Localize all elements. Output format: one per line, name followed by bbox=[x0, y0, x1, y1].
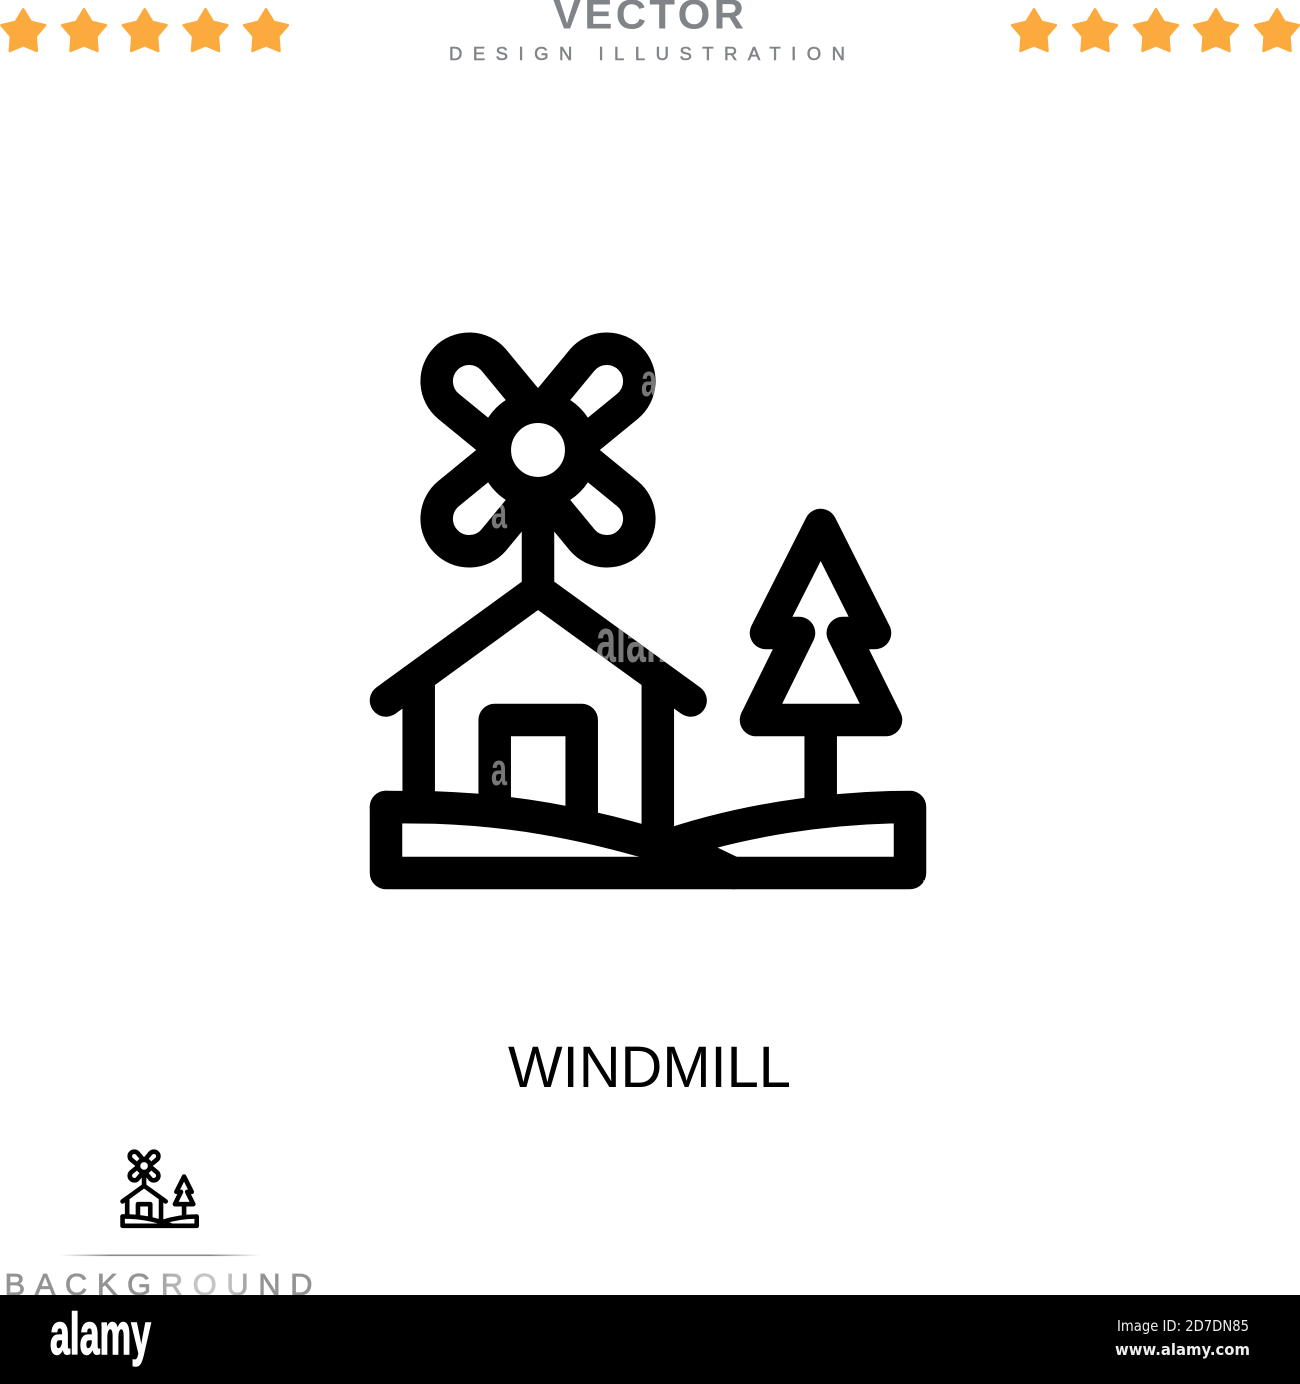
alamy watermark fragments on icon: a bbox=[491, 487, 508, 538]
alamy watermark fragments on icon bbox=[492, 372, 924, 882]
small windmill icon bbox=[123, 1152, 197, 1226]
roof bbox=[386, 590, 691, 700]
door bbox=[495, 720, 582, 820]
divider line bbox=[60, 1254, 260, 1256]
ground bbox=[386, 807, 910, 873]
background label: BACKGROUND bbox=[4, 1267, 312, 1302]
subheading: design illustration: DESIGN ILLUSTRATION bbox=[449, 43, 845, 64]
icon title: windmill: WINDMILL bbox=[508, 1035, 791, 1100]
windmill mast bbox=[522, 490, 554, 600]
tree trunk bbox=[804, 720, 837, 810]
tree crown bbox=[756, 525, 886, 720]
windmill hub bbox=[495, 407, 581, 493]
website: www.alamy.com bbox=[1115, 1340, 1250, 1359]
icon: windmill house and tree bbox=[386, 349, 910, 873]
right star rating bbox=[1012, 9, 1299, 51]
image id: Image ID: 2D7DN85 bbox=[1117, 1317, 1249, 1335]
footer bar bbox=[0, 1295, 1300, 1384]
alamy logo: alamy bbox=[50, 1302, 151, 1367]
house walls bbox=[419, 676, 658, 845]
alamy watermark fragments on icon: a bbox=[641, 355, 658, 406]
windmill blade: bottom right bbox=[550, 463, 639, 551]
windmill blade: bottom left bbox=[437, 463, 526, 551]
left star rating bbox=[1, 9, 288, 51]
alamy watermark fragments on icon: a bbox=[491, 744, 508, 795]
windmill blade: top right bbox=[550, 349, 639, 437]
alamy watermark fragments on icon: al bbox=[893, 870, 933, 939]
windmill blade: top left bbox=[437, 349, 526, 437]
left hill bbox=[386, 807, 733, 873]
alamy watermark fragments on icon: alam bbox=[596, 607, 678, 676]
